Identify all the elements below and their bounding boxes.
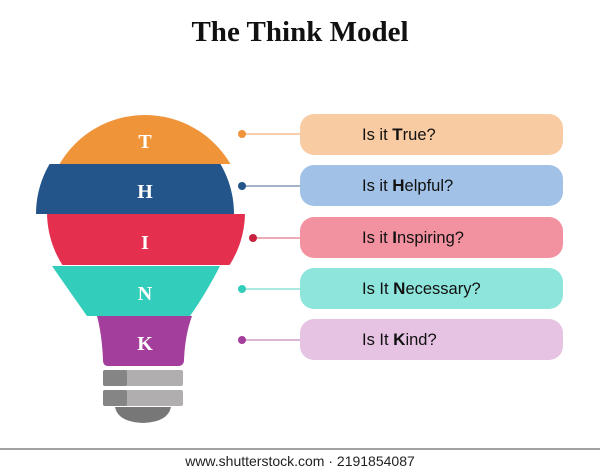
band T — [60, 115, 230, 164]
band K: K — [137, 333, 153, 355]
pill: kind — [300, 319, 563, 360]
band I — [40, 214, 250, 265]
band H — [30, 164, 240, 214]
band N: N — [138, 283, 153, 305]
pill: necessary — [300, 268, 563, 309]
pill: helpful — [300, 165, 563, 206]
band I: I — [141, 232, 149, 254]
band T: T — [138, 131, 152, 153]
pill: inspiring: Is it Inspiring? — [362, 228, 464, 247]
footer: www.shutterstock.com · 2191854087 — [184, 453, 415, 469]
band K — [97, 316, 192, 366]
bulb base — [103, 370, 183, 423]
pill: helpful: Is it Helpful? — [362, 176, 453, 195]
pill: true: Is it True? — [362, 125, 436, 144]
title: The Think Model — [191, 16, 409, 48]
pill: inspiring — [300, 217, 563, 258]
bulb — [30, 114, 250, 423]
pill: true — [300, 114, 563, 155]
connectors — [238, 130, 300, 344]
pill: necessary: Is It Necessary? — [362, 279, 481, 298]
pill: kind: Is It Kind? — [362, 330, 437, 349]
band H: H — [137, 181, 153, 203]
band N — [52, 266, 220, 316]
